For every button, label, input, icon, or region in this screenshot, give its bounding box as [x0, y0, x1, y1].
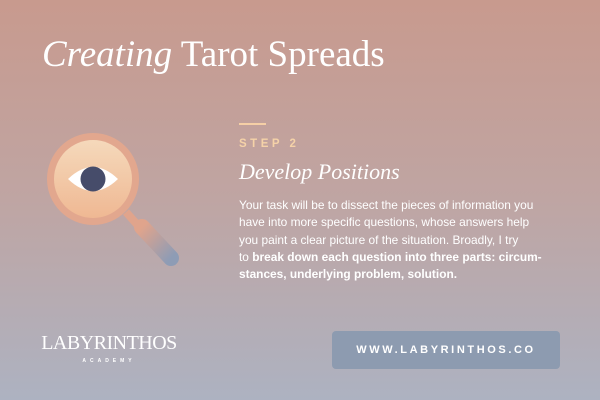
button: website: WWW.LABYRINTHOS.CO	[356, 344, 536, 356]
divider accent	[239, 123, 266, 125]
logo	[41, 332, 177, 364]
button: website	[332, 331, 560, 369]
logo: LABYRINTHOS	[41, 332, 177, 354]
body text: have into more specific questions, whose answers help	[239, 215, 529, 229]
title: Creating Tarot Spreads	[42, 34, 385, 75]
body text: to break down each question into three parts: circum-	[239, 250, 542, 264]
heading: Develop Positions	[239, 159, 400, 184]
body text: you paint a clear picture of the situation. Broadly, I try	[239, 233, 518, 247]
step label: STEP 2	[239, 138, 299, 150]
body text: Your task will be to dissect the pieces of information you	[239, 198, 533, 212]
logo: ACADEMY	[82, 358, 136, 364]
body text	[239, 198, 542, 281]
body text: stances, underlying problem, solution.	[239, 267, 457, 281]
